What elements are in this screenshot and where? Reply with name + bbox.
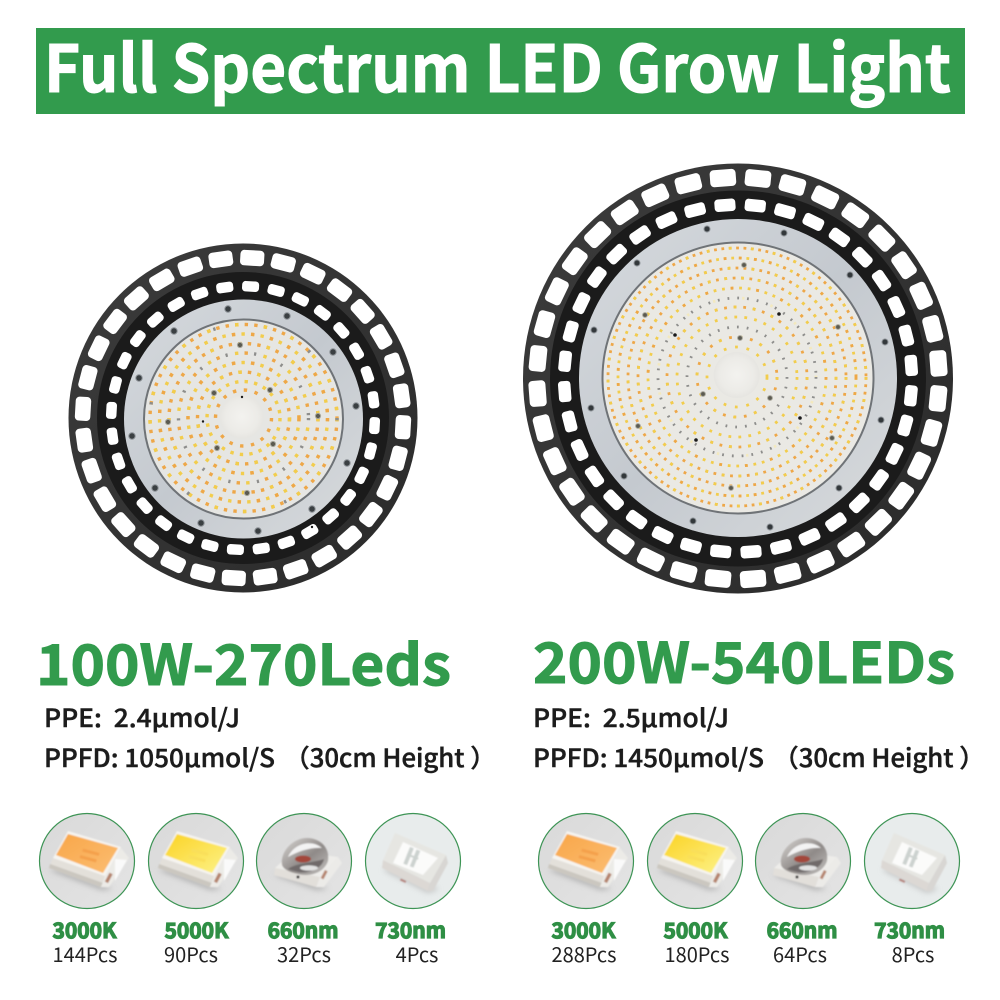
panel screws xyxy=(636,263,840,490)
PPFD value: PPFD: 1450μmol/S xyxy=(533,739,764,775)
lamp outer housing xyxy=(523,164,953,594)
banner background xyxy=(36,28,965,114)
chip 730nm xyxy=(864,814,960,968)
ring screws xyxy=(129,306,359,534)
chip 3000K: 3000K xyxy=(53,915,117,945)
silver ring xyxy=(124,300,363,538)
panel pin holes xyxy=(673,312,802,442)
title banner xyxy=(36,17,965,114)
chip 5000K xyxy=(648,814,742,968)
chip 3000K: 288Pcs xyxy=(552,939,616,968)
LED chips: 200W xyxy=(538,814,960,968)
chip 730nm: 8Pcs xyxy=(892,939,934,968)
chip 5000K xyxy=(148,814,244,968)
steel rim xyxy=(144,320,343,518)
lamp outer housing xyxy=(68,244,418,592)
chip 660nm xyxy=(756,814,850,968)
chip 5000K: 180Pcs xyxy=(665,939,729,968)
chip 5000K: 5000K xyxy=(165,915,229,945)
chip 660nm: 660nm xyxy=(268,915,338,945)
chip 730nm: 730nm xyxy=(375,915,446,945)
chip 660nm xyxy=(256,814,352,968)
housing slots xyxy=(709,153,960,376)
chip 5000K: 5000K xyxy=(664,915,728,945)
panel: 100W lamp xyxy=(40,214,446,622)
steel rim xyxy=(602,242,874,514)
chip 3000K xyxy=(538,814,634,968)
lamp inner dark band xyxy=(550,190,926,566)
PPFD value: PPFD: 1050μmol/S xyxy=(44,739,275,775)
LED panel rings xyxy=(150,324,337,512)
chip 5000K: 90Pcs xyxy=(164,939,218,968)
ring screws xyxy=(588,226,888,530)
specs: 200W xyxy=(533,699,985,775)
chip 3000K: 144Pcs xyxy=(53,939,117,968)
PPE value: PPE: 2.4μmol/J xyxy=(44,699,240,735)
centre hub xyxy=(714,352,760,398)
banner title text: Full Spectrum LED Grow Light xyxy=(44,17,951,111)
chip 730nm: 4Pcs xyxy=(396,939,438,968)
panel: 200W lamp xyxy=(512,153,964,604)
height note: （30cm Height ） xyxy=(284,739,496,775)
chip 660nm: 64Pcs xyxy=(773,939,827,968)
chip 660nm: 32Pcs xyxy=(277,939,331,968)
centre hub xyxy=(220,395,264,439)
LED chips: 100W xyxy=(40,814,460,968)
housing slots xyxy=(220,250,446,622)
PPE value: PPE: 2.5μmol/J xyxy=(533,699,729,735)
chip 3000K: 3000K xyxy=(552,915,616,945)
LED panel rings xyxy=(608,248,866,506)
height note: （30cm Height ） xyxy=(773,739,985,775)
heading: 100W: 100W-270Leds xyxy=(36,621,451,702)
panel pin holes xyxy=(202,308,313,528)
chip 730nm: 730nm xyxy=(874,915,945,945)
chip 730nm xyxy=(366,814,460,968)
silver ring xyxy=(579,219,897,537)
chip 3000K xyxy=(40,814,134,968)
heading: 200W: 200W-540LEDs xyxy=(533,619,955,700)
specs: 100W xyxy=(44,699,496,775)
chip 660nm: 660nm xyxy=(767,915,837,945)
lamp inner dark band xyxy=(97,272,389,564)
panel screws xyxy=(165,342,321,496)
